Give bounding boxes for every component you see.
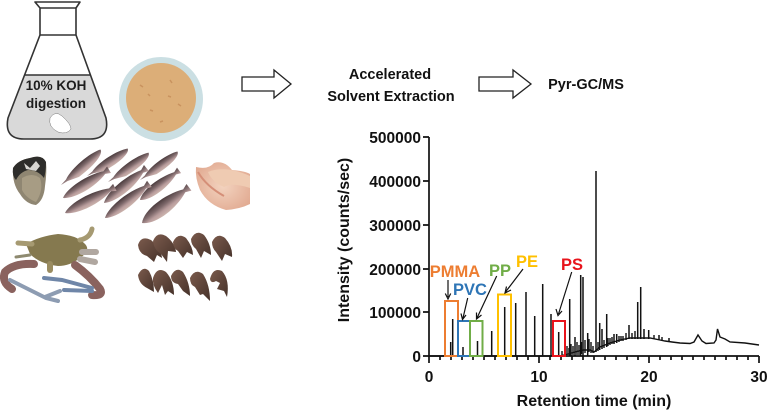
heading: accelerated solvent extraction bbox=[327, 67, 455, 105]
polymer marker: PE bbox=[498, 253, 538, 356]
x axis tick labels: 30 bbox=[750, 369, 768, 386]
polymer marker: PE: PE bbox=[516, 253, 538, 271]
flask label: 10% KOH bbox=[26, 78, 86, 93]
polymer marker: PP bbox=[470, 262, 511, 356]
y axis tick labels bbox=[369, 130, 421, 366]
icon: crab bbox=[4, 229, 101, 301]
y axis tick labels: 100000 bbox=[369, 305, 421, 322]
arrow: to extraction bbox=[242, 70, 291, 98]
y axis tick labels: 300000 bbox=[369, 218, 421, 235]
y axis tick labels: 0 bbox=[412, 349, 421, 366]
x axis tick labels: 20 bbox=[640, 369, 658, 386]
x axis title: Retention time (min) bbox=[517, 393, 671, 410]
icon: flask with KOH digestion bbox=[7, 2, 107, 139]
polymer marker: PVC: PVC bbox=[453, 281, 487, 299]
chromatogram trace bbox=[429, 171, 759, 356]
x axis tick labels: 10 bbox=[530, 369, 548, 386]
y axis tick labels: 200000 bbox=[369, 262, 421, 279]
icon: fish meat bbox=[196, 162, 250, 210]
y axis title: Intensity (counts/sec) bbox=[336, 158, 353, 322]
icon: oyster bbox=[13, 157, 46, 205]
chart: chromatogram bbox=[336, 130, 768, 410]
sample in flask bbox=[50, 113, 71, 133]
flask label line two: digestion bbox=[26, 96, 86, 111]
icons: fish group bbox=[58, 146, 194, 229]
polymer marker: PVC bbox=[453, 281, 487, 356]
polymer marker: PP: PP bbox=[489, 262, 511, 280]
icons: shrimp group bbox=[138, 233, 232, 301]
heading: accelerated solvent extraction: Accelerated bbox=[349, 67, 431, 83]
axes bbox=[423, 137, 759, 363]
polymer marker: PMMA bbox=[430, 263, 480, 356]
y axis tick labels: 400000 bbox=[369, 174, 421, 191]
polymer marker: PS: PS bbox=[561, 256, 583, 274]
heading: Pyr-GC/MS: Pyr-GC/MS bbox=[548, 77, 624, 93]
icon: digested sample filter disc bbox=[119, 57, 203, 141]
x axis tick labels bbox=[425, 369, 768, 386]
arrow: to Pyr-GC/MS bbox=[479, 70, 531, 98]
x axis tick labels: 0 bbox=[425, 369, 433, 386]
polymer marker: PS bbox=[553, 256, 583, 356]
y axis tick labels: 500000 bbox=[369, 130, 421, 147]
polymer marker: PMMA: PMMA bbox=[430, 263, 480, 281]
heading: accelerated solvent extraction: Solvent Extraction bbox=[327, 89, 455, 105]
